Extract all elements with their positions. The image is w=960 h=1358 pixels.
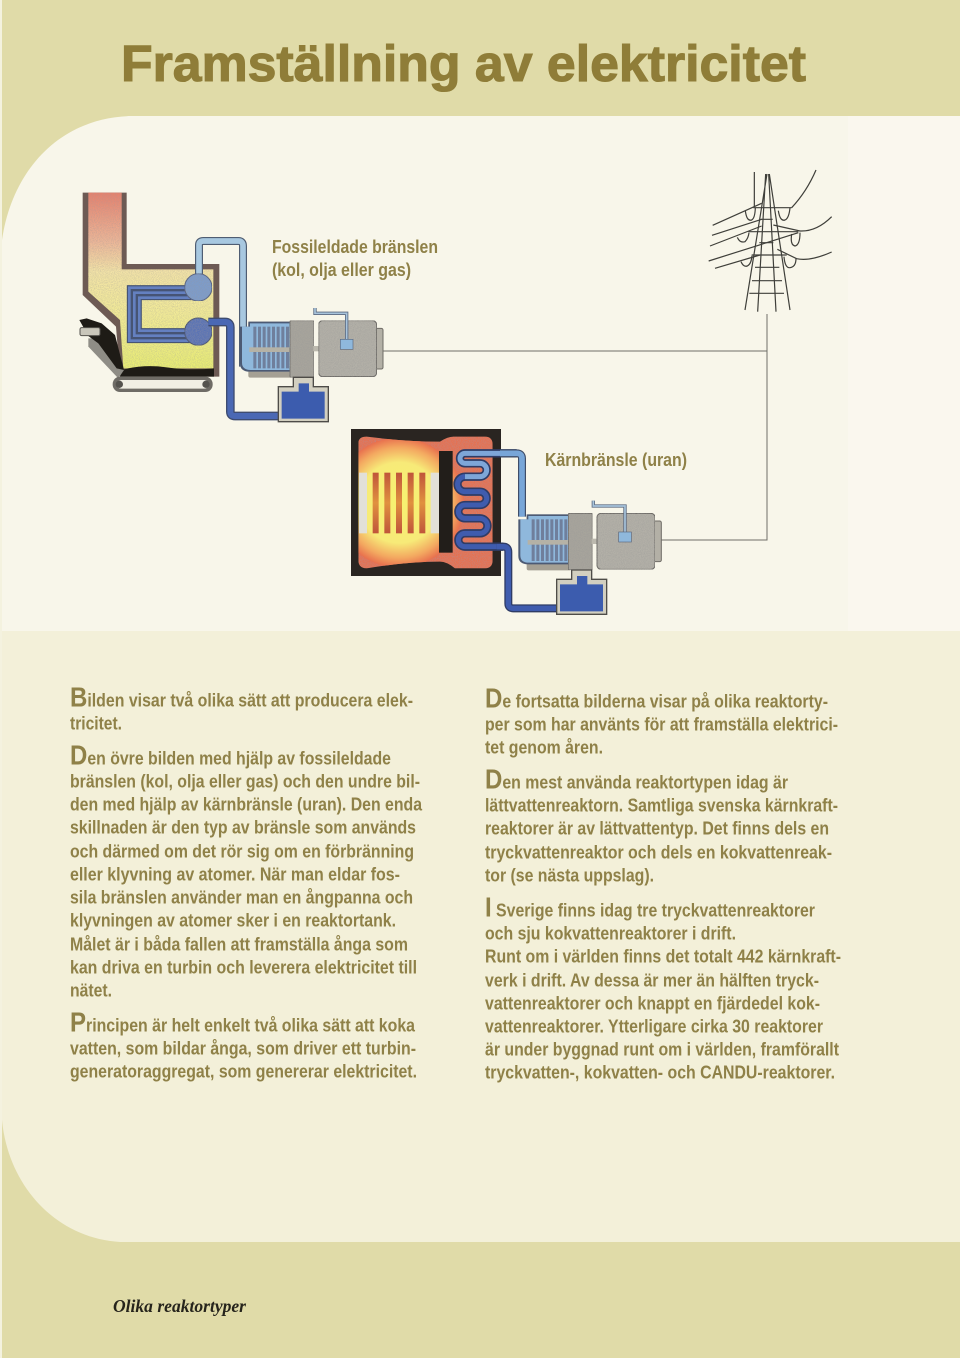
text column: left: Bilden visar två olika sätt att producera elek- [70, 682, 413, 712]
text column: left: generatoraggregat, som genererar elektricitet. [70, 1060, 417, 1082]
text column: left: den med hjälp av kärnbränsle (uran). Den enda [70, 794, 423, 814]
feedwater pipe [497, 547, 560, 608]
text column: right: tet genom åren. [485, 736, 603, 758]
conveyor [113, 377, 213, 392]
shield wall [439, 451, 453, 553]
text column: left: eller klyvning av atomer. När man eldar fos- [70, 864, 400, 884]
label: fossil fuels: (kol, olja eller gas) [272, 259, 411, 280]
text column: left: skillnaden är den typ av bränsle som används [70, 816, 416, 838]
turbine, generator and condenser [518, 501, 661, 614]
text column: left: och därmed om det rör sig om en förbränning [70, 840, 414, 862]
text column: left: vatten, som bildar ånga, som driver ett turbin- [70, 1038, 416, 1058]
text column: left: tricitet. [70, 712, 122, 734]
panel: diagram background [2, 116, 960, 631]
text column: left: bränslen (kol, olja eller gas) och den undre bil- [70, 770, 420, 792]
turbine, generator and condenser [240, 308, 383, 422]
text column: right [485, 682, 841, 1082]
label: fossil fuels: Fossileldade bränslen [272, 236, 438, 257]
text column: left: Principen är helt enkelt två olika sätt att koka [70, 1006, 416, 1038]
text column: left [70, 682, 423, 1082]
label: nuclear fuel: Kärnbränsle (uran) [545, 449, 687, 470]
label: fossil fuels [272, 236, 438, 280]
footer label: Olika reaktortyper [113, 1296, 246, 1316]
feedwater pipe [208, 322, 287, 416]
boiler coils [129, 288, 192, 341]
text column: right: tor (se nästa uppslag). [485, 864, 654, 886]
furnace and flue [83, 193, 219, 377]
panel: text background [2, 631, 960, 1242]
text column: right: Runt om i världen finns det totalt 442 kärnkraft- [485, 946, 841, 966]
steam drums [185, 274, 212, 345]
diagram: nuclear plant [334, 429, 661, 614]
left edge strip [0, 0, 2, 1358]
icon: power pylon [709, 170, 832, 312]
title: Framställning av elektricitet [121, 35, 806, 92]
text column: left: nätet. [70, 980, 112, 1000]
power lines connecting generators to pylon [381, 314, 767, 540]
text column: right: lättvattenreaktorn. Samtliga svenska kärnkraft- [485, 794, 838, 816]
steam pipe [199, 241, 243, 367]
text column: right: I Sverige finns idag tre tryckvattenreaktorer [485, 892, 815, 922]
text column: right: vattenreaktorer och knappt en fjärdedel kok- [485, 992, 820, 1014]
fuel rods [359, 473, 439, 533]
text column: right: tryckvattenreaktor och dels en kokvattenreak- [485, 842, 832, 862]
reactor shell [351, 429, 501, 576]
text column: right: och sju kokvattenreaktorer i drift. [485, 922, 736, 944]
panel: diagram background right tint [848, 116, 960, 631]
text column: left: kan driva en turbin och leverera elektricitet till [70, 956, 417, 978]
text column: right: per som har använts för att framställa elektrici- [485, 714, 838, 734]
text column: right: tryckvatten-, kokvatten- och CANDU-reaktorer. [485, 1062, 835, 1082]
text column: right: verk i drift. Av dessa är mer än hälften tryck- [485, 970, 819, 990]
text column: right: Den mest använda reaktortypen idag är [485, 764, 788, 794]
reactor core [358, 436, 493, 568]
text column: right: är under byggnad runt om i världen, framförallt [485, 1038, 839, 1060]
text column: right: reaktorer är av lättvattentyp. Det finns dels en [485, 818, 829, 838]
serpentine coil [458, 453, 517, 547]
text column: left: Målet är i båda fallen att framställa ånga som [70, 934, 408, 954]
diagram: fossil fuel plant [79, 193, 383, 422]
text column: right: De fortsatta bilderna visar på olika reaktorty- [485, 682, 828, 714]
text column: right: vattenreaktorer. Ytterligare cirka 30 reaktorer [485, 1016, 823, 1036]
text column: left: sila bränslen använder man en ångpanna och [70, 886, 413, 908]
text column: left: Den övre bilden med hjälp av fossileldade [70, 740, 391, 770]
steam pipe [500, 453, 522, 517]
text column: left: klyvningen av atomer sker i en reaktortank. [70, 910, 396, 930]
coal chute [79, 318, 124, 378]
